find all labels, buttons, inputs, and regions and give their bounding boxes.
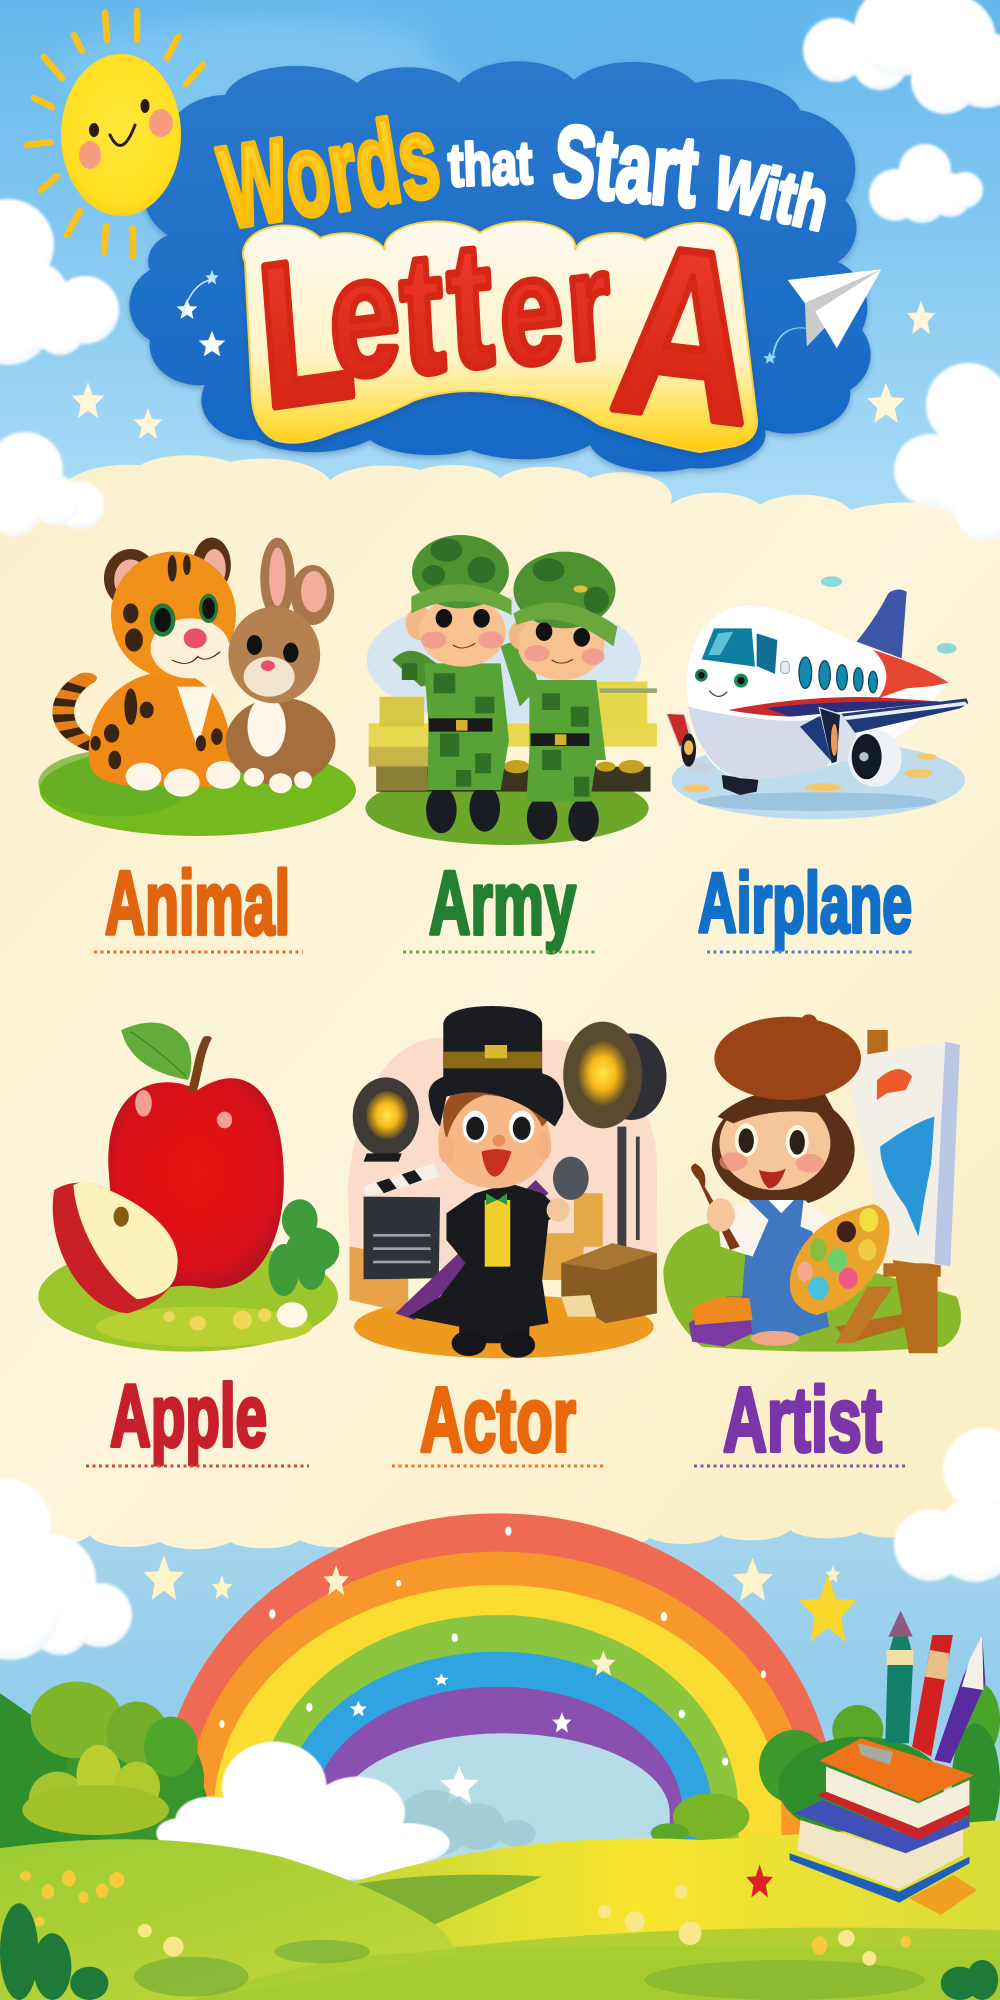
label: Animal: Animal [105, 854, 290, 954]
illustration: tiger and rabbit [38, 538, 356, 836]
word card: Artist [663, 1014, 961, 1471]
cloud: right small [869, 144, 983, 223]
icon: stack of books [790, 1738, 977, 1915]
cloud: top right [803, 0, 1000, 114]
cloud: centre [156, 1742, 450, 1880]
word: Letter: e [323, 217, 405, 414]
cloud: lower left [0, 1479, 132, 1660]
dotted underline [392, 1464, 605, 1468]
word: Letter: L [251, 212, 361, 452]
title cloud blue blob [129, 61, 871, 472]
illustration: smiling airplane [666, 576, 968, 819]
label: Apple: Apple [110, 1366, 267, 1465]
word: Words: Words [212, 90, 447, 253]
illustration: girl painter at easel [663, 1014, 961, 1353]
stars around title [72, 270, 935, 439]
word card: Actor [348, 1006, 667, 1471]
clouds: upper sky [0, 0, 1000, 540]
scene: rainbow landscape [0, 1513, 1000, 2000]
dotted underline [86, 1464, 309, 1468]
letter: A: A [602, 193, 771, 475]
word: Letter: r [561, 219, 616, 393]
illustration: soldiers and tank [365, 535, 657, 845]
panel: cream paper [0, 455, 1000, 1549]
icon: pencils [885, 1611, 985, 1763]
word card: Airplane [666, 576, 968, 952]
label: Artist: Artist [723, 1369, 882, 1471]
dotted underline [403, 950, 598, 954]
rainbow [159, 1513, 836, 1863]
title plate: Letter A [243, 193, 771, 475]
word card: Animal [38, 538, 356, 954]
bushes: right [651, 1682, 1000, 1843]
cloud: left [0, 199, 119, 365]
cloud: lower left [0, 432, 104, 536]
label: Army: Army [429, 854, 576, 954]
icon: paper plane with trail [763, 269, 881, 364]
hills [0, 1820, 1000, 2000]
cloud: lower right [894, 363, 1000, 540]
label: Actor: Actor [420, 1369, 576, 1471]
illustration: red apple and slice [38, 1022, 339, 1352]
background mist bushes [395, 1790, 536, 1857]
word card: Army [365, 535, 657, 954]
word: Letter: t [396, 216, 448, 411]
bushes: left [0, 1682, 223, 1850]
dotted underline [94, 950, 303, 954]
dotted underline [694, 1464, 907, 1468]
title: Words that Start With [212, 90, 835, 253]
illustration: actor with top hat, spotlights, clapperboard [348, 1006, 667, 1358]
stars in sky [144, 1555, 856, 1642]
cloud: lower right [894, 1428, 1000, 1582]
word: that: that [447, 129, 533, 199]
word: With: With [706, 143, 835, 246]
icon: smiling sun [27, 11, 203, 256]
word: Letter: e [494, 223, 568, 399]
word: Letter: t [443, 204, 497, 407]
word: Start: Start [549, 104, 702, 228]
dotted underline [707, 950, 913, 954]
clouds: lower sky [0, 1428, 1000, 1660]
word card: Apple [38, 1022, 339, 1466]
